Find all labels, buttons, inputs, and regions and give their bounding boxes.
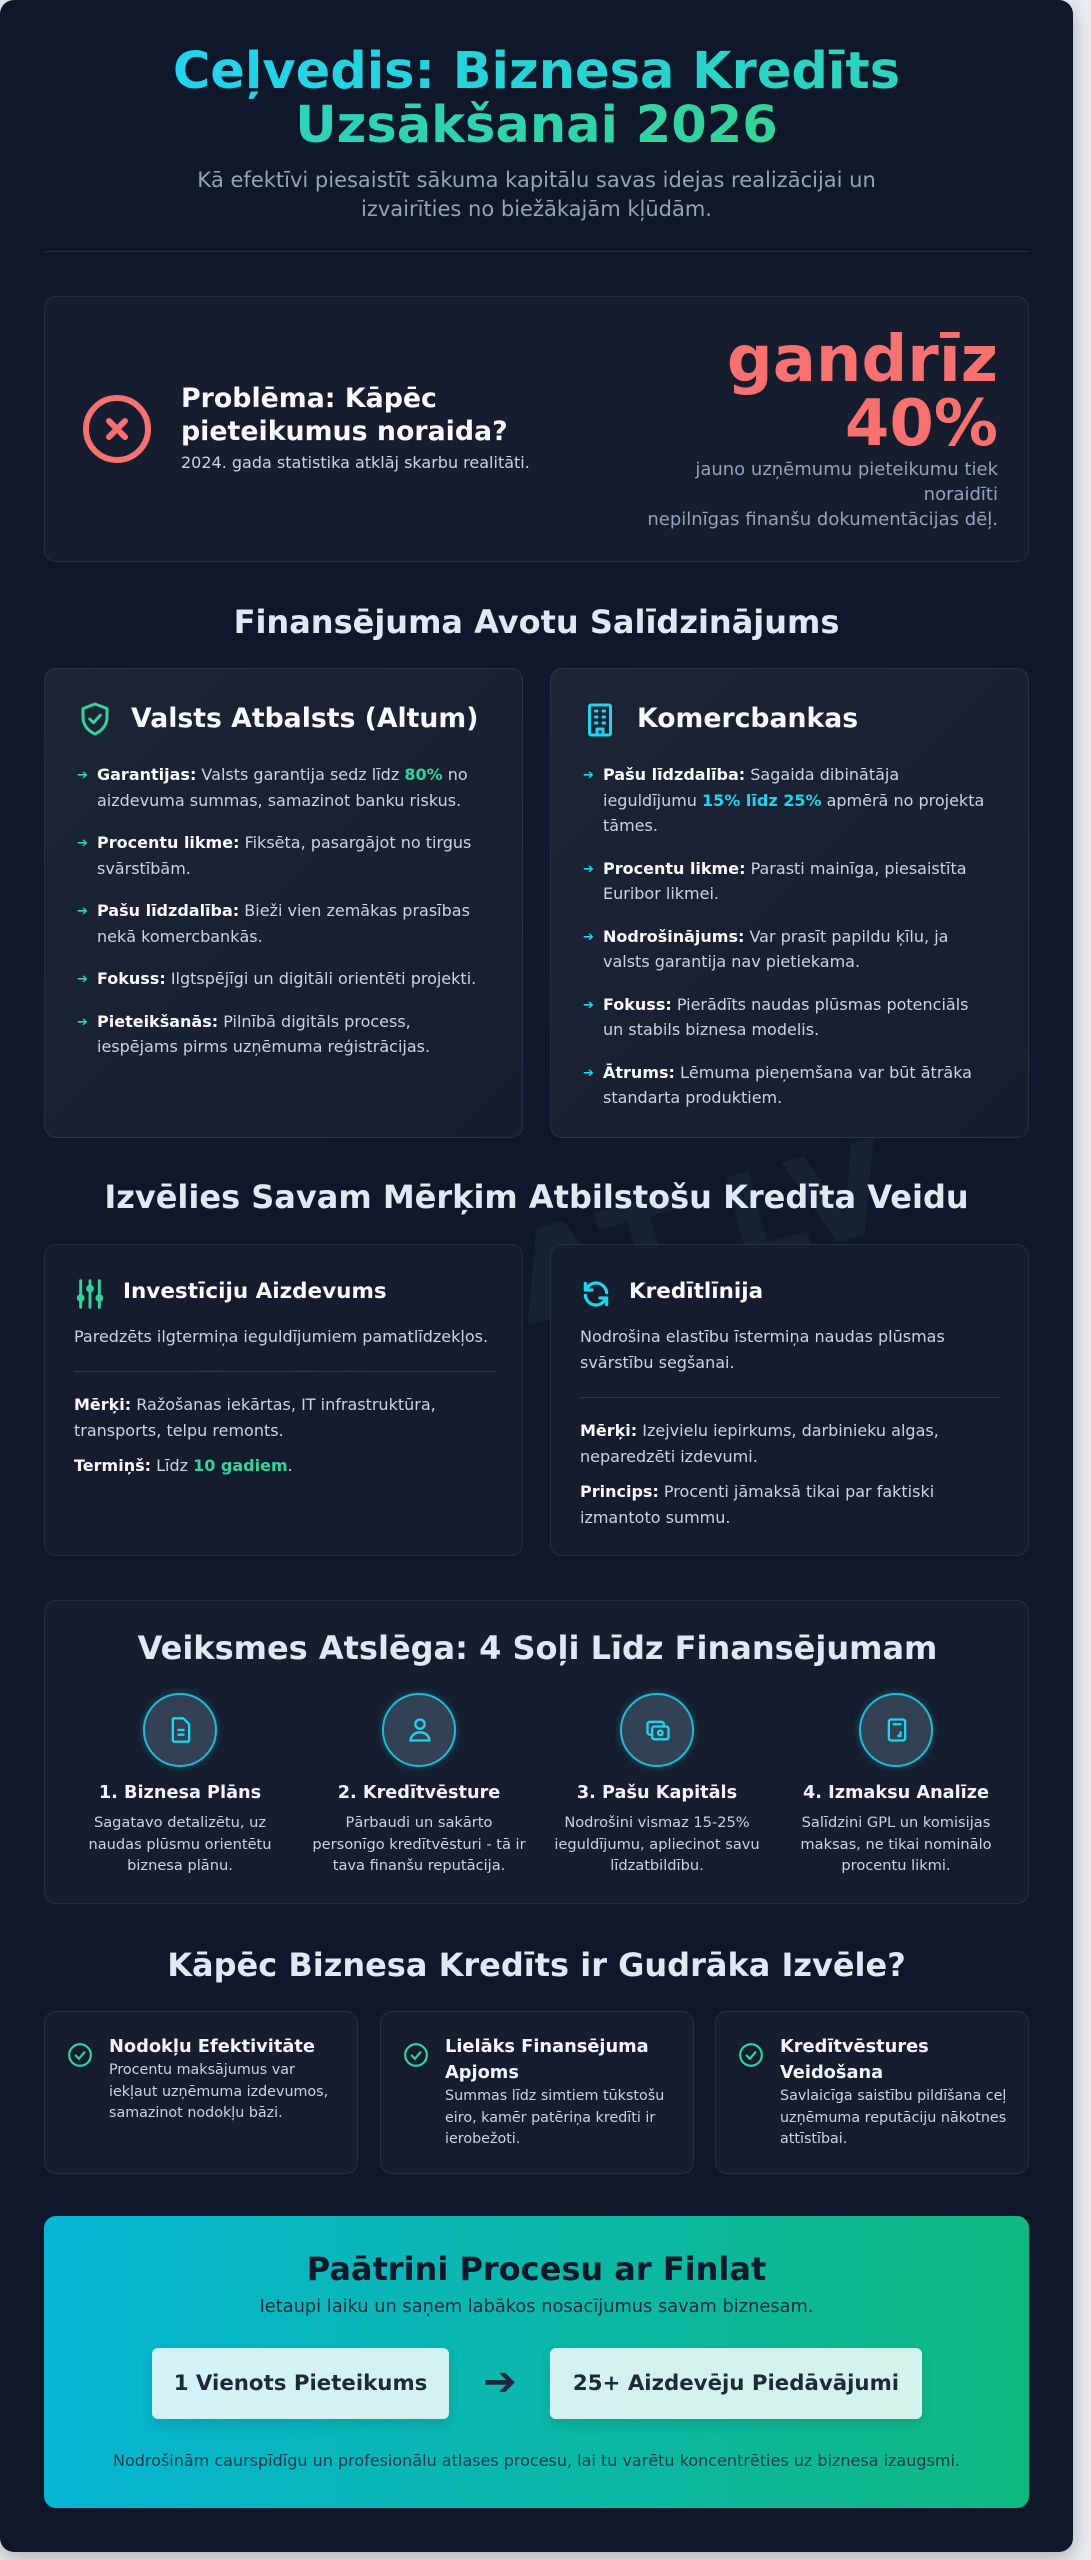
details: Mērķi: Ražošanas iekārtas, IT infrastruktūra, transports, telpu remonts. — [74, 1395, 436, 1440]
bullet list: ➔ — [583, 930, 594, 944]
CTA heading: Paātrini Procesu ar Finlat — [307, 2250, 766, 2288]
stat caption: noraidīti — [924, 484, 998, 505]
icon: check — [404, 2043, 428, 2067]
panel: credit line — [550, 1244, 1029, 1556]
panel: Altum — [44, 668, 523, 1138]
benefit card 3 — [715, 2011, 1029, 2174]
step 3: 3. Pašu Kapitāls — [577, 1783, 737, 1803]
heading: Komercbankas — [637, 703, 858, 734]
benefit card 1 — [44, 2011, 358, 2174]
heading: Valsts Atbalsts (Altum) — [131, 703, 478, 734]
heading: why: Kāpēc Biznesa Kredīts ir Gudrāka Izvēle? — [167, 1946, 906, 1984]
subtitle: izvairīties no biežākajām kļūdām. — [361, 197, 712, 221]
icon: person — [382, 1693, 456, 1767]
heading: Investīciju Aizdevums — [123, 1279, 387, 1304]
CTA subtext: Ietaupi laiku un saņem labākos nosacījumus savam biznesam. — [260, 2296, 813, 2317]
bullet list: Fokuss: Pierādīts naudas plūsmas potenciāls un stabils biznesa modelis. — [603, 994, 968, 1039]
stat caption: nepilnīgas finanšu dokumentācijas dēļ. — [647, 509, 998, 530]
box: 1 application — [152, 2348, 449, 2419]
benefit card 3: Kredītvēstures Veidošana — [780, 2036, 929, 2083]
bullet list — [583, 765, 984, 1107]
bullet list: Pašu līdzdalība: Bieži vien zemākas prasības nekā komercbankās. — [97, 901, 470, 946]
bullet list: Nodrošinājums: Var prasīt papildu ķīlu, ja valsts garantija nav pietiekama. — [603, 926, 948, 971]
step 2: 2. Kredītvēsture — [338, 1783, 500, 1803]
bullet list: Pieteikšanās: Pilnībā digitāls process, iespējams pirms uzņēmuma reģistrācijas. — [97, 1012, 430, 1056]
CTA footnote: Nodrošinām caurspīdīgu un profesionālu atlases procesu, lai tu varētu koncentrēties uz biznesa izaugsmi. — [113, 2451, 960, 2470]
benefit card 2: Summas līdz simtiem tūkstošu eiro, kamēr patēriņa kredīti ir ierobežoti. — [445, 2088, 664, 2147]
problem subtext: 2024. gada statistika atklāj skarbu realitāti. — [181, 453, 530, 472]
bullet list: Pašu līdzdalība: Sagaida dibinātāja ieguldījumu 15% līdz 25% apmērā no projekta tāmes. — [603, 765, 984, 835]
stat caption: jauno uzņēmumu pieteikumu tiek — [695, 459, 998, 480]
subtitle: Kā efektīvi piesaistīt sākuma kapitālu savas idejas realizācijai un — [197, 168, 876, 192]
stat: gandrīz 40%: gandrīz — [727, 323, 998, 397]
box: 1 application: 1 Vienots Pieteikums — [174, 2371, 427, 2396]
icon: document — [143, 1693, 217, 1767]
icon: sliders — [76, 1279, 104, 1309]
benefit card 3: Savlaicīga saistību pildīšana ceļ uzņēmuma reputāciju nākotnes attīstībai. — [780, 2088, 1006, 2147]
title: Ceļvedis: Biznesa Kredīts — [173, 42, 900, 101]
bullet list: ➔ — [77, 1014, 88, 1030]
stat caption — [647, 459, 998, 530]
heading: comparison: Finansējuma Avotu Salīdzinājums — [234, 603, 839, 641]
panel: CTA — [44, 2216, 1029, 2508]
box: 25+ offers: 25+ Aizdevēju Piedāvājumi — [573, 2371, 899, 2396]
benefit card 1: Procentu maksājumus var iekļaut uzņēmuma izdevumos, samazinot nodokļu bāzi. — [109, 2062, 328, 2121]
stat: gandrīz 40%: 40% — [845, 387, 998, 461]
box: 25+ offers — [550, 2348, 922, 2419]
arrow: ➔ — [483, 2359, 517, 2405]
stat: gandrīz 40% — [727, 323, 998, 461]
icon: refresh — [584, 1281, 608, 1307]
bullet list: Procentu likme: Fiksēta, pasargājot no tirgus svārstībām. — [97, 833, 471, 878]
bullet list: ➔ — [77, 836, 88, 851]
panel: investment loan — [44, 1244, 523, 1556]
bullet list — [77, 765, 476, 1056]
icon: building — [588, 704, 612, 736]
steps heading: Veiksmes Atslēga: 4 Soļi Līdz Finansējumam — [138, 1629, 937, 1667]
icon: shield — [82, 702, 108, 736]
bullet list: ➔ — [583, 768, 594, 783]
bullet list: ➔ — [583, 1066, 594, 1080]
bullet list: ➔ — [583, 998, 594, 1012]
benefit card 2: Lielāks Finansējuma Apjoms — [445, 2036, 649, 2083]
description: Nodrošina elastību īstermiņa naudas plūsmas svārstību segšanai. — [580, 1327, 945, 1372]
step 4: 4. Izmaksu Analīze — [803, 1783, 989, 1803]
step 2: Pārbaudi un sakārto personīgo kredītvēsturi - tā ir tava finanšu reputācija. — [312, 1814, 526, 1874]
panel: credit line: Princips: Procenti jāmaksā tikai par faktiski izmantoto summu. — [580, 1482, 934, 1526]
icon: calculator — [859, 1693, 933, 1767]
step 1 — [88, 1690, 272, 1874]
problem heading: Problēma: Kāpēc pieteikumus noraida? — [181, 383, 508, 447]
icon: check — [739, 2043, 763, 2067]
bullet list: Fokuss: Ilgtspējīgi un digitāli orientēti projekti. — [97, 969, 476, 988]
panel: 4 steps — [44, 1600, 1029, 1904]
heading: Kredītlīnija — [629, 1279, 763, 1304]
bullet list: ➔ — [77, 972, 88, 987]
step 4 — [800, 1690, 992, 1874]
title — [173, 42, 900, 155]
benefit card 2 — [380, 2011, 694, 2174]
panel: problem — [44, 296, 1029, 562]
icon: check — [68, 2043, 92, 2067]
subtitle — [197, 168, 876, 221]
bullet list: Garantijas: Valsts garantija sedz līdz 80% no aizdevuma summas, samazinot banku riskus. — [97, 765, 468, 810]
bullet list: Procentu likme: Parasti mainīga, piesaistīta Euribor likmei. — [603, 858, 967, 903]
step 2 — [312, 1690, 526, 1874]
title: Uzsākšanai 2026 — [295, 96, 778, 155]
icon: money — [620, 1693, 694, 1767]
benefit card 1: Nodokļu Efektivitāte — [109, 2036, 315, 2057]
bullet list: Ātrums: Lēmuma pieņemšana var būt ātrāka standarta produktiem. — [603, 1062, 972, 1107]
icon: error circle — [83, 395, 151, 463]
step 1: 1. Biznesa Plāns — [99, 1783, 261, 1803]
step 3 — [554, 1690, 760, 1874]
step 1: Sagatavo detalizētu, uz naudas plūsmu orientētu biznesa plānu. — [88, 1814, 272, 1874]
panel: banks — [550, 668, 1029, 1138]
watermark: FINLAT.LV — [169, 1113, 911, 1442]
bullet list: ➔ — [77, 904, 88, 919]
step 4: Salīdzini GPL un komisijas maksas, ne tikai nominālo procentu likmi. — [800, 1814, 992, 1874]
bullet list: ➔ — [583, 862, 594, 876]
heading: credit types: Izvēlies Savam Mērķim Atbilstošu Kredīta Veidu — [104, 1178, 969, 1216]
panel: investment loan: Termiņš: Līdz 10 gadiem. — [74, 1456, 293, 1475]
description: Paredzēts ilgtermiņa ieguldījumiem pamatlīdzekļos. — [74, 1327, 488, 1346]
details: Mērķi: Izejvielu iepirkums, darbinieku algas, neparedzēti izdevumi. — [580, 1421, 939, 1466]
step 3: Nodrošini vismaz 15-25% ieguldījumu, apliecinot savu līdzatbildību. — [554, 1814, 760, 1874]
bullet list: ➔ — [77, 768, 88, 783]
